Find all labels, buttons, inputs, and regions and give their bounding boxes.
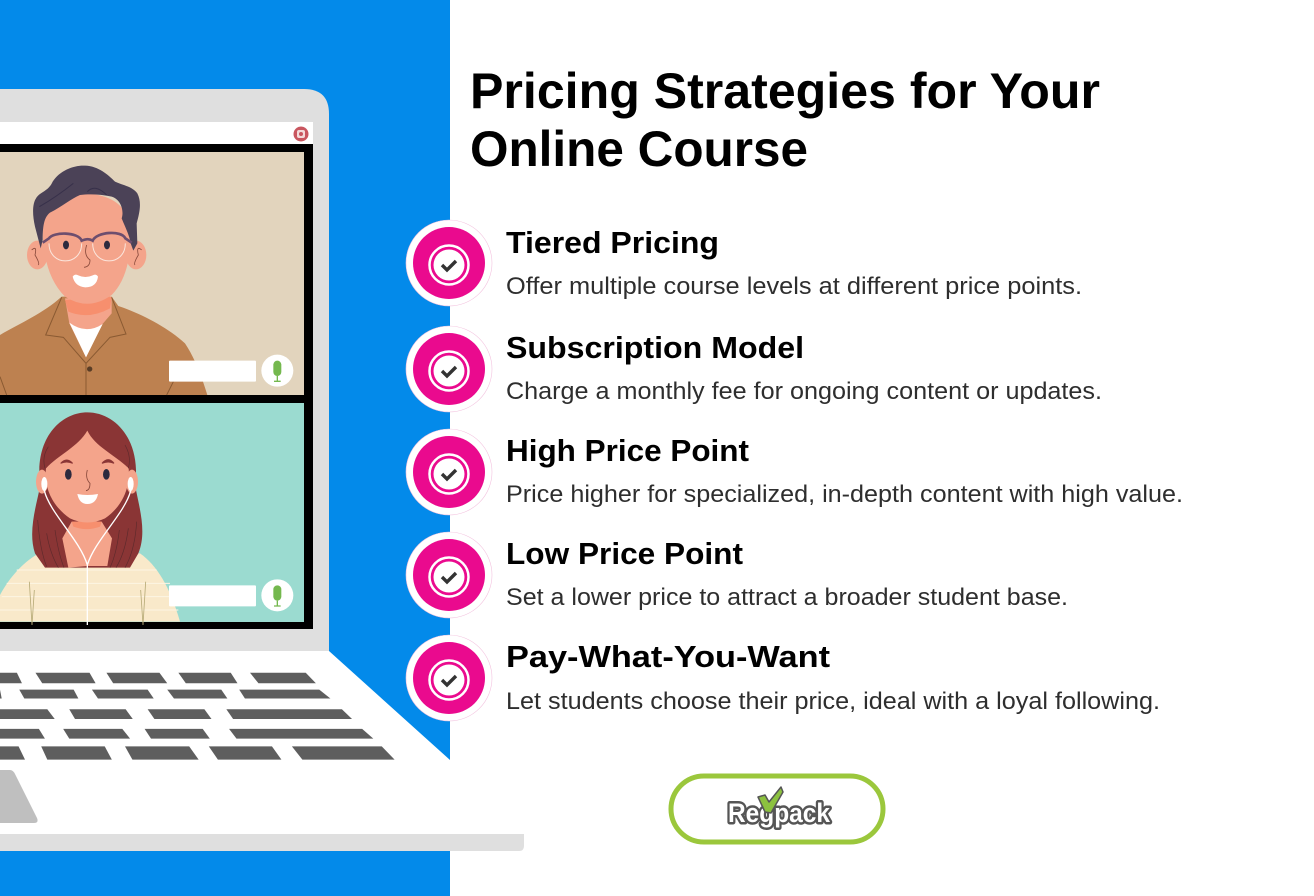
strategy: low price point: Low Price Point — [506, 536, 743, 571]
strategy: high price point: Price higher for specialized, in-depth content with high value. — [506, 481, 1183, 508]
strategy: subscription model: Subscription Model — [506, 330, 804, 365]
icon: logo check mark — [758, 787, 783, 813]
icon: check badge — [406, 532, 492, 618]
icon: check badge — [406, 429, 492, 515]
strategy: subscription model — [406, 326, 1102, 412]
laptop keyboard base — [0, 651, 524, 851]
strategy: pay-what-you-want: Pay-What-You-Want — [506, 639, 830, 674]
strategy: pay-what-you-want: Let students choose their price, ideal with a loyal following. — [506, 688, 1160, 715]
strategy: tiered pricing: Offer multiple course levels at different price points. — [506, 273, 1082, 300]
title: Online Course — [470, 121, 808, 177]
strategy: low price point — [406, 532, 1068, 618]
video tile: man with glasses — [0, 152, 304, 395]
icon: check badge — [406, 326, 492, 412]
video tile: woman with earphones — [0, 403, 304, 625]
touchpad — [0, 770, 38, 823]
logo: Regpack badge — [671, 776, 883, 842]
title — [470, 63, 1100, 177]
video window title bar — [0, 122, 313, 145]
strategy: low price point: Set a lower price to attract a broader student base. — [506, 584, 1068, 611]
video frame — [0, 144, 313, 629]
blue background panel — [0, 0, 450, 896]
title: Pricing Strategies for Your — [470, 63, 1100, 119]
strategy: high price point — [406, 429, 1183, 515]
strategy: tiered pricing — [406, 220, 1082, 306]
laptop illustration — [0, 89, 524, 851]
laptop lid — [0, 89, 329, 652]
keyboard keys — [0, 673, 395, 760]
logo: Regpack badge: Regpack — [728, 798, 831, 828]
strategy: tiered pricing: Tiered Pricing — [506, 225, 719, 260]
icon: check badge — [406, 635, 492, 721]
strategy: pay-what-you-want — [406, 635, 1160, 721]
icon: check badge — [406, 220, 492, 306]
strategy: subscription model: Charge a monthly fee for ongoing content or updates. — [506, 378, 1102, 405]
strategy: high price point: High Price Point — [506, 433, 749, 468]
